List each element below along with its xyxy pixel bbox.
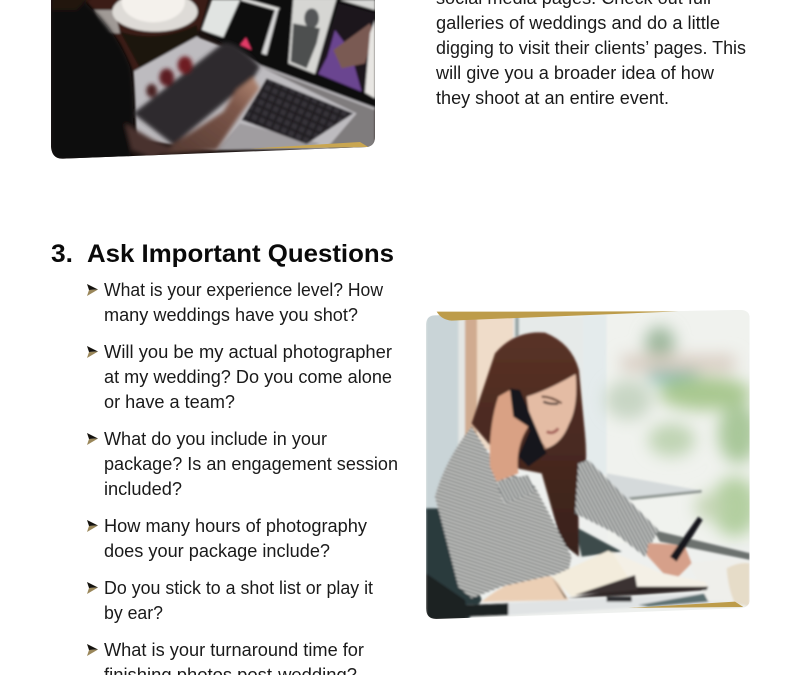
phone xyxy=(510,388,547,467)
question 5 xyxy=(87,578,373,623)
pen xyxy=(670,517,703,562)
photo: woman on phone taking notes xyxy=(426,310,758,620)
gold accent: bottom of laptop photo xyxy=(250,142,368,149)
hair xyxy=(472,332,586,557)
shirt xyxy=(435,427,572,598)
question 2 xyxy=(87,342,392,412)
question 1 xyxy=(87,280,384,325)
body text: right column paragraph: they shoot at an entire event. xyxy=(436,88,669,108)
question 3: What do you include in your xyxy=(104,429,327,449)
face xyxy=(527,374,576,448)
question 6: What is your turnaround time for xyxy=(104,640,364,660)
question 1: many weddings have you shot? xyxy=(104,305,358,325)
question 6 xyxy=(87,640,364,675)
heading: 3. Ask Important Questions: Ask Important Questions xyxy=(87,240,394,268)
question 4 xyxy=(87,516,367,561)
gold accent: top of photo xyxy=(437,311,678,321)
question 2: or have a team? xyxy=(104,392,235,412)
question 5: Do you stick to a shot list or play it xyxy=(104,578,373,598)
question 1: What is your experience level? How xyxy=(104,280,384,300)
notebook xyxy=(552,551,638,597)
question 2: Will you be my actual photographer xyxy=(104,342,392,362)
heading: 3. Ask Important Questions: 3. xyxy=(51,240,73,268)
body text: right column paragraph: galleries of weddings and do a little xyxy=(436,13,720,33)
body text: right column paragraph: digging to visit their clients’ pages. This xyxy=(436,38,746,58)
question 2: at my wedding? Do you come alone xyxy=(104,367,392,387)
hand on phone xyxy=(490,390,528,482)
question 4: does your package include? xyxy=(104,541,330,561)
bullet list of questions xyxy=(87,280,398,675)
body text: right column paragraph xyxy=(435,0,746,108)
question 4: How many hours of photography xyxy=(104,516,367,536)
question 3: included? xyxy=(104,479,182,499)
gold accent: bottom of photo xyxy=(628,602,743,608)
question 3 xyxy=(87,429,398,499)
writing hand xyxy=(647,543,692,577)
question 3: package? Is an engagement session xyxy=(104,454,398,474)
photo: laptop and phone xyxy=(51,0,378,160)
body text: right column paragraph: will give you a broader idea of how xyxy=(435,63,715,83)
question 5: by ear? xyxy=(104,603,163,623)
